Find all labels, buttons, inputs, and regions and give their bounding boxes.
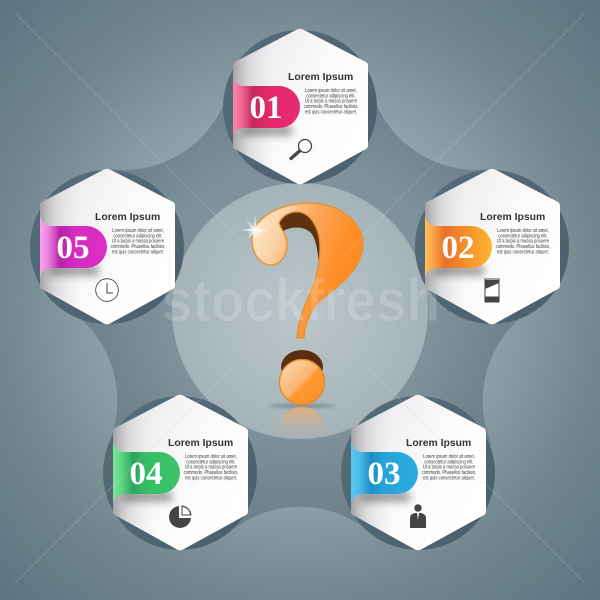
- dot back shadow: [281, 350, 323, 384]
- hexagon 04: commodo. Phasellus facilisis,: [184, 470, 238, 475]
- hexagon 03: est quis consectetur aliquet.: [423, 475, 475, 480]
- hexagon 02: consectetur adipiscing elit.: [498, 233, 548, 238]
- hexagon 04: est quis consectetur aliquet.: [185, 475, 237, 480]
- watermark: stockfresh: [162, 267, 440, 334]
- dot: [280, 360, 324, 404]
- hexagon 02: Lorem ipsum dolor sit amet,: [497, 228, 549, 233]
- icon: pie chart: [169, 506, 192, 528]
- sparkle: [240, 213, 270, 243]
- hexagon 02: commodo. Phasellus facilisis,: [496, 244, 550, 249]
- hexagon 04: [103, 393, 257, 553]
- hexagon 01: Ut a turpis a massa posuere: [305, 98, 358, 104]
- hexagon 04: Lorem ipsum dolor sit amet,: [185, 454, 237, 459]
- question mark body: [252, 203, 363, 338]
- hexagon 05: consectetur adipiscing elit.: [113, 233, 163, 238]
- hexagon 02: Lorem Ipsum: [480, 212, 545, 223]
- hexagon 02: 02: [442, 230, 474, 266]
- hexagon 01: Lorem ipsum dolor sit amet,: [305, 88, 357, 93]
- icon: clock: [96, 279, 118, 301]
- question mark icon: [240, 203, 363, 438]
- hexagon 03: Ut a turpis a massa posuere: [423, 464, 476, 470]
- hexagon 04: Lorem Ipsum: [168, 438, 233, 449]
- hexagon 02: [415, 167, 569, 327]
- hexagon 04: consectetur adipiscing elit.: [186, 459, 236, 464]
- hexagon 01: consectetur adipiscing elit.: [306, 93, 356, 98]
- hexagon 01: est quis consectetur aliquet.: [305, 109, 357, 114]
- icon: businessman: [410, 504, 426, 528]
- icon: magnifier: [291, 140, 312, 158]
- hexagon 01: commodo. Phasellus facilisis,: [304, 104, 358, 109]
- hexagon 03: Lorem ipsum dolor sit amet,: [423, 454, 475, 459]
- hexagon 03: 03: [368, 456, 400, 492]
- hexagon 03: [341, 393, 495, 553]
- icon: smartphone: [485, 279, 499, 302]
- hexagon 02: est quis consectetur aliquet.: [497, 249, 549, 254]
- hexagon 05: est quis consectetur aliquet.: [112, 249, 164, 254]
- hexagon 05: [30, 167, 184, 327]
- dot reflection: [280, 407, 324, 438]
- question mark inner brown: [279, 212, 320, 268]
- dot shadow: [268, 404, 336, 408]
- hexagon 01: 01: [250, 90, 282, 126]
- hexagon 03: consectetur adipiscing elit.: [424, 459, 474, 464]
- hexagon 03: commodo. Phasellus facilisis,: [422, 470, 476, 475]
- hexagon 04: Ut a turpis a massa posuere: [185, 464, 238, 470]
- hexagon 03: Lorem Ipsum: [406, 438, 471, 449]
- star-shaped darker band: [82, 75, 518, 528]
- hexagon 01: [223, 27, 377, 187]
- hexagon 05: Lorem ipsum dolor sit amet,: [112, 228, 164, 233]
- central circle: [172, 183, 428, 439]
- hexagon 05: commodo. Phasellus facilisis,: [111, 244, 165, 249]
- hexagon 02: Ut a turpis a massa posuere: [497, 238, 550, 244]
- hexagon 05: Ut a turpis a massa posuere: [112, 238, 165, 244]
- hexagon 04: 04: [130, 456, 162, 492]
- hexagon 05: 05: [56, 230, 90, 266]
- hexagon 05: Lorem Ipsum: [95, 212, 160, 223]
- hexagon 01: Lorem Ipsum: [288, 72, 353, 83]
